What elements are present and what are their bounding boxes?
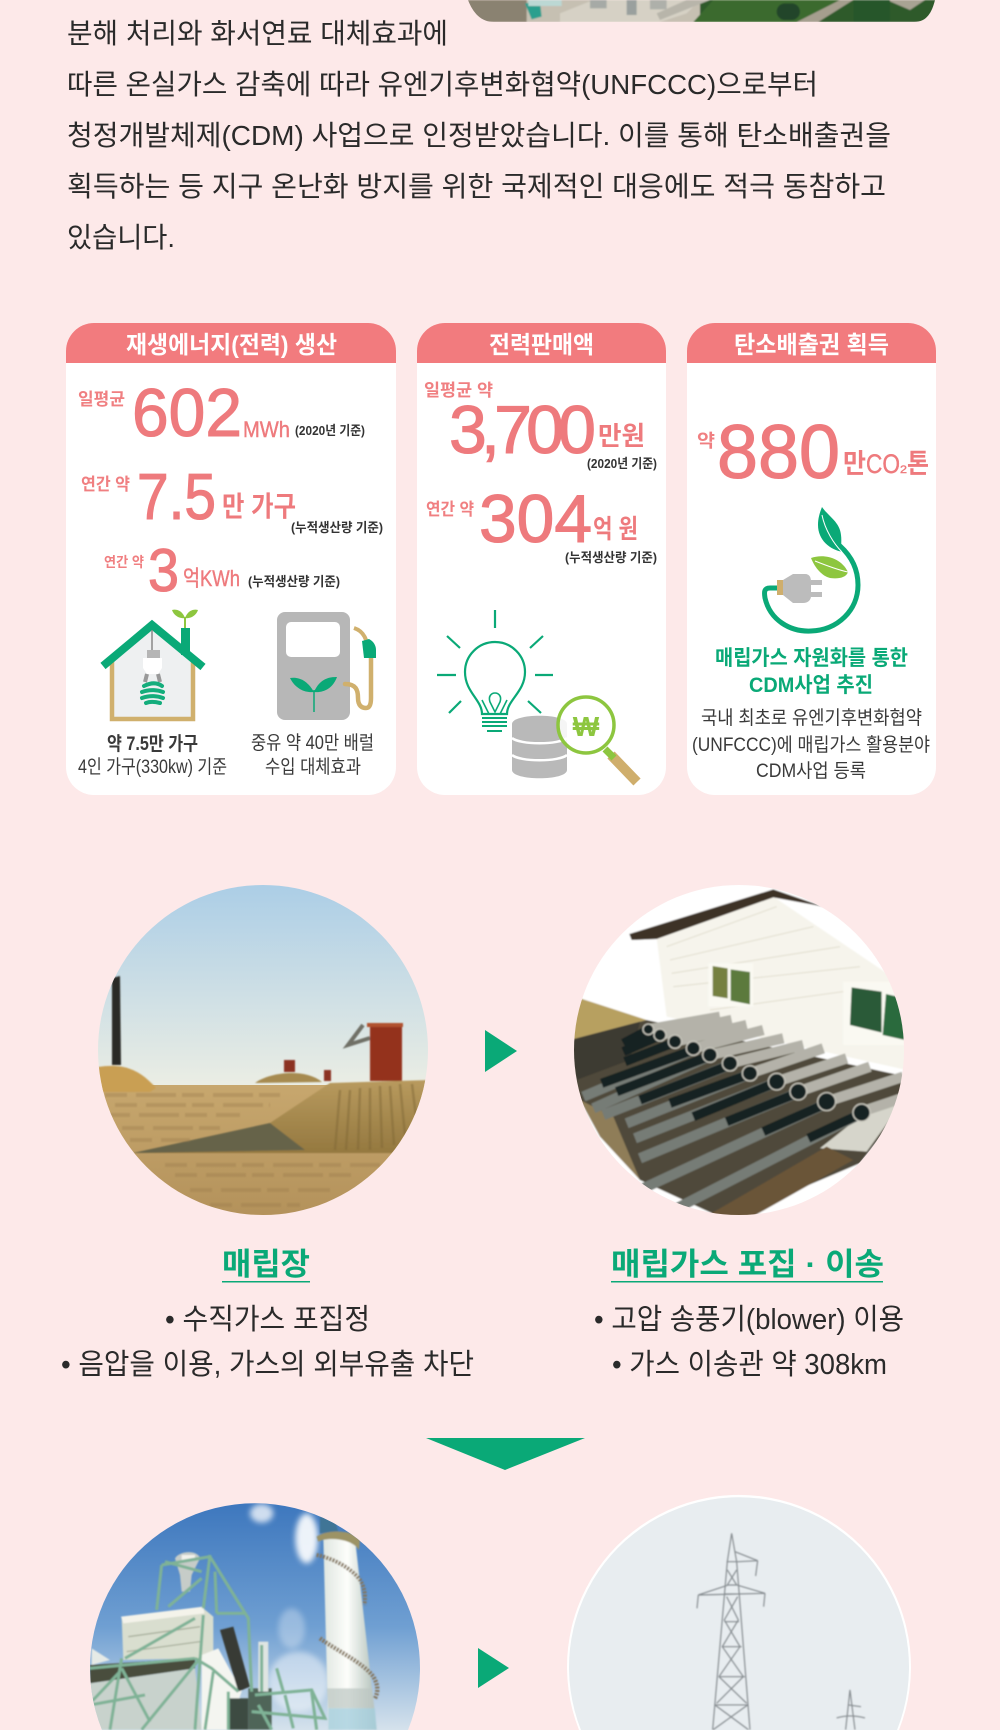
stat: 8.8 million tons CO2: 880	[717, 410, 840, 495]
intro paragraph: 있습니다.	[67, 222, 175, 253]
text: gas collection bullets	[594, 1304, 904, 1381]
stat: daily 602 MWh: MWh	[243, 417, 290, 442]
text: landfill bullets	[61, 1304, 474, 1381]
icon: plug and leaf	[765, 507, 858, 631]
caption: household	[78, 733, 227, 778]
stat: 8.8 million tons CO2: 2	[900, 464, 907, 476]
green subheading: CDM사업 추진	[749, 674, 873, 697]
stat: daily 602 MWh	[78, 375, 365, 451]
text: landfill bullets: • 수직가스 포집정	[165, 1304, 370, 1336]
icon: house with bulb	[103, 610, 203, 721]
caption: oil substitution: 수입 대체효과	[265, 756, 361, 778]
heading: landfill: 매립장	[222, 1247, 310, 1282]
stat: daily 37 million won: 3,700	[449, 392, 596, 468]
stat: yearly 30.4 billion won: 304	[479, 481, 592, 557]
stat: yearly 30.4 billion won: (누적생산량 기준)	[565, 550, 657, 565]
heading: landfill gas collection and transfer: 매립가스 포집 · 이송	[611, 1247, 884, 1282]
stat: 75 thousand households: 7.5	[137, 460, 216, 533]
stat: 8.8 million tons CO2: CO	[866, 449, 900, 479]
icon: coin stack	[512, 716, 567, 778]
text: gas collection bullets: • 고압 송풍기(blower) 이용	[594, 1304, 904, 1336]
icon: magnifier with won sign	[558, 697, 637, 782]
icon: magnifier with won sign: ₩	[573, 711, 600, 742]
stat: 75 thousand households	[81, 460, 383, 535]
stat: daily 37 million won	[424, 381, 657, 471]
stat: 300 million kWh: 연간 약	[104, 554, 144, 570]
description text: CDM사업 등록	[756, 760, 866, 782]
panel heading: 전력판매액	[489, 332, 594, 359]
intro paragraph: 따른 온실가스 감축에 따라 유엔기후변화협약(UNFCCC)으로부터	[67, 69, 818, 100]
stat: daily 602 MWh: 일평균	[78, 390, 125, 409]
stat: 300 million kWh: 3	[148, 537, 179, 604]
stat: daily 602 MWh: (2020년 기준)	[295, 423, 365, 438]
stat: 8.8 million tons CO2	[697, 410, 929, 495]
photo: transmission towers	[565, 1495, 915, 1730]
intro paragraph: 청정개발체제(CDM) 사업으로 인정받았습니다. 이를 통해 탄소배출권을	[67, 120, 891, 151]
stat: yearly 30.4 billion won	[426, 481, 657, 565]
icon: lightbulb with rays	[437, 610, 553, 731]
text: gas collection bullets: • 가스 이송관 약 308km	[612, 1348, 887, 1381]
panel heading: 탄소배출권 획득	[734, 332, 889, 359]
stat: 75 thousand households: (누적생산량 기준)	[291, 520, 383, 535]
green subheading	[715, 647, 908, 697]
green subheading: 매립가스 자원화를 통한	[715, 647, 908, 670]
panel heading: 재생에너지(전력) 생산	[126, 332, 337, 359]
caption: household: 4인 가구(330kw) 기준	[78, 756, 227, 778]
panel: renewable energy production	[66, 323, 396, 795]
caption: household: 약 7.5만 가구	[107, 733, 198, 755]
intro paragraph: 획득하는 등 지구 온난화 방지를 위한 국제적인 대응에도 적극 동참하고	[67, 171, 886, 202]
description text: (UNFCCC)에 매립가스 활용분야	[692, 734, 930, 756]
stat: 8.8 million tons CO2: 톤	[907, 449, 929, 479]
photo: gas collection pipes	[570, 880, 910, 1220]
intro paragraph: 분해 처리와 화서연료 대체효과에	[67, 18, 448, 49]
icon: fuel pump with sprout	[277, 612, 376, 720]
stat: daily 602 MWh: 602	[132, 375, 242, 451]
caption: oil substitution: 중유 약 40만 배럴	[251, 732, 374, 754]
stat: yearly 30.4 billion won: 억 원	[593, 514, 638, 544]
photo: aerial view of plant (cropped)	[467, 0, 940, 22]
description text	[692, 707, 930, 782]
caption: oil substitution	[251, 732, 374, 778]
panel: carbon credits	[687, 323, 936, 795]
stat: 75 thousand households: 연간 약	[81, 475, 130, 494]
stat: 8.8 million tons CO2: 약	[697, 431, 715, 451]
photo: power plant	[85, 1500, 430, 1730]
arrow: right (lower)	[478, 1648, 509, 1688]
stat: daily 37 million won: (2020년 기준)	[587, 456, 657, 471]
stat: 75 thousand households: 만 가구	[222, 491, 296, 522]
stat: daily 37 million won: 만원	[598, 421, 645, 451]
stat: 300 million kWh: 억KWh	[183, 566, 240, 591]
stat: daily 37 million won: 일평균 약	[424, 381, 493, 400]
stat: 300 million kWh: (누적생산량 기준)	[248, 574, 340, 589]
stat: 300 million kWh	[104, 537, 340, 604]
stat: yearly 30.4 billion won: 연간 약	[426, 500, 474, 519]
description text: 국내 최초로 유엔기후변화협약	[701, 707, 922, 729]
panel: electricity sales	[417, 323, 666, 795]
stat: 8.8 million tons CO2: 만	[843, 449, 866, 479]
intro paragraph	[67, 18, 891, 253]
text: landfill bullets: • 음압을 이용, 가스의 외부유출 차단	[61, 1348, 474, 1381]
photo: landfill	[90, 880, 435, 1220]
arrow: right	[485, 1030, 517, 1072]
arrow: down	[426, 1438, 585, 1470]
